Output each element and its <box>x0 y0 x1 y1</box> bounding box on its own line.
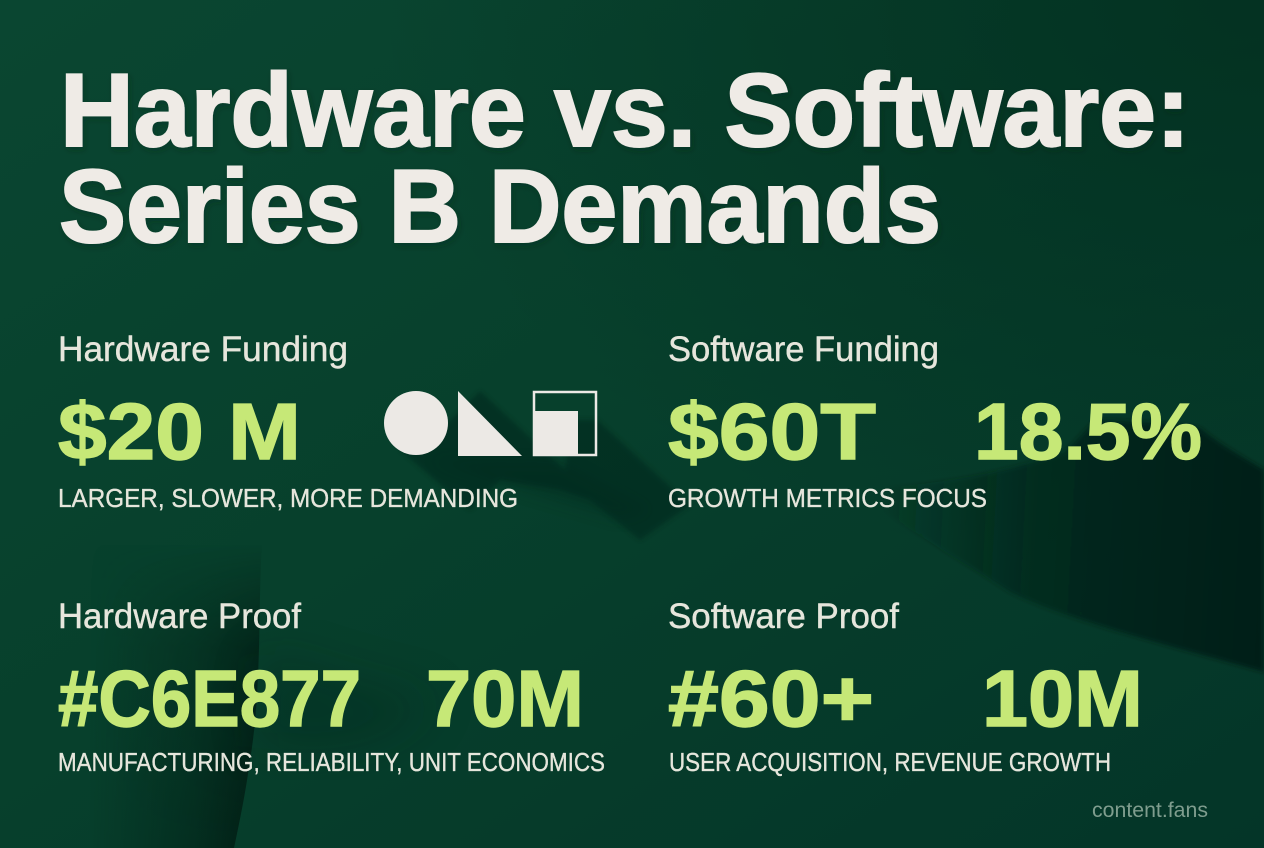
watermark: content.fans <box>1092 799 1208 822</box>
stat: 18.5%: 18.5% <box>974 387 1202 476</box>
title: Hardware vs. Software: <box>60 53 1190 169</box>
stat: 10M: 10M <box>982 654 1143 743</box>
heading: software funding: Software Funding <box>668 330 939 369</box>
stat: #60+: #60+ <box>668 654 874 743</box>
label: manufacturing: MANUFACTURING, RELIABILITY, UNIT ECONOMICS <box>58 747 605 777</box>
heading: hardware funding: Hardware Funding <box>58 330 348 369</box>
stat: $20 M: $20 M <box>58 387 301 476</box>
panel: software funding <box>668 330 1202 513</box>
icon: geometric shapes with long shadow <box>384 391 690 540</box>
label: growth metrics: GROWTH METRICS FOCUS <box>668 483 987 513</box>
stat: 70M: 70M <box>426 654 584 743</box>
label: larger slower: LARGER, SLOWER, MORE DEMANDING <box>58 483 518 513</box>
heading: software proof: Software Proof <box>668 597 899 636</box>
panel: software proof <box>668 597 1143 777</box>
stat: $60T: $60T <box>668 387 876 476</box>
heading: hardware proof: Hardware Proof <box>58 597 301 636</box>
title <box>59 53 1190 265</box>
panel: hardware funding <box>58 330 690 540</box>
title: Series B Demands <box>59 149 941 265</box>
panel: hardware proof <box>58 597 605 777</box>
label: user acquisition: USER ACQUISITION, REVENUE GROWTH <box>669 747 1111 777</box>
stat: #C6E877: #C6E877 <box>58 654 361 743</box>
